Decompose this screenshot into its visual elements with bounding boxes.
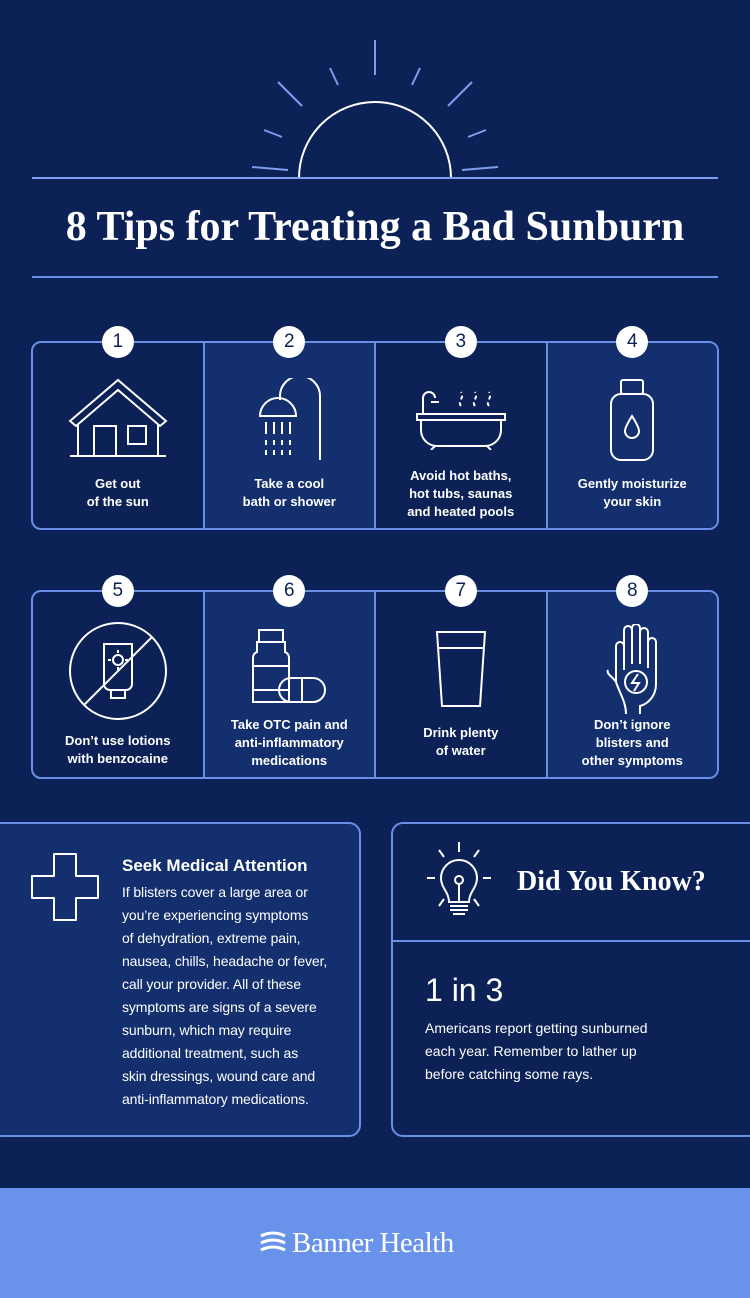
footer (0, 1188, 750, 1298)
tips row 1: 2 (284, 331, 295, 352)
tip 1: of the sun (87, 494, 149, 509)
tip 6: anti-inflammatory (235, 735, 344, 750)
body text: If blisters cover a large area or (122, 884, 308, 900)
panel: seek medical attention (0, 822, 361, 1137)
body text (122, 884, 327, 1107)
tip 5 (33, 592, 204, 777)
body text: you’re experiencing symptoms (122, 907, 308, 923)
tip 8: Don’t ignore (594, 717, 671, 732)
tip 4: your skin (603, 494, 661, 509)
tip 1: Get out (95, 476, 140, 491)
tips row 2 (31, 590, 719, 779)
stat text: before catching some rays. (425, 1066, 593, 1082)
title: 8 Tips for Treating a Bad Sunburn (66, 204, 684, 250)
stat: 1 in 3 (425, 972, 503, 1008)
tip 7 (376, 592, 548, 777)
body text: skin dressings, wound care and (122, 1068, 315, 1084)
stat text: each year. Remember to lather up (425, 1043, 637, 1059)
tip 2: bath or shower (243, 494, 336, 509)
tips row 1: 3 (455, 331, 466, 352)
body text: anti-inflammatory medications. (122, 1091, 309, 1107)
panel: did you know (391, 822, 750, 1137)
tips row 2: 6 (284, 580, 295, 601)
logo: Banner Health (292, 1226, 454, 1258)
tip 4 (548, 343, 717, 528)
tip 8: blisters and (596, 735, 669, 750)
tips row 1: 1 (112, 331, 123, 352)
heading: Did You Know? (517, 866, 706, 897)
heading: Seek Medical Attention (122, 856, 307, 875)
body text: of dehydration, extreme pain, (122, 930, 300, 946)
tips row 2: 7 (455, 580, 466, 601)
tip 2 (204, 343, 376, 528)
tip 7: of water (436, 743, 486, 758)
tip 8: other symptoms (582, 753, 683, 768)
tip 1 (33, 343, 204, 528)
body text: symptoms are signs of a severe (122, 999, 317, 1015)
tip 6: Take OTC pain and (231, 717, 348, 732)
body text: sunburn, which may require (122, 1022, 291, 1038)
tip 3: hot tubs, saunas (409, 486, 512, 501)
tip 3: and heated pools (407, 504, 514, 519)
tips row 2: 8 (627, 580, 638, 601)
sun graphic (32, 40, 718, 179)
icon: light bulb (427, 842, 491, 915)
tip 5: Don’t use lotions (65, 733, 170, 748)
tips row 1 (31, 341, 719, 530)
body text: nausea, chills, headache or fever, (122, 953, 327, 969)
body text: call your provider. All of these (122, 976, 301, 992)
tip 6 (204, 592, 376, 777)
stat text: Americans report getting sunburned (425, 1020, 648, 1036)
tip 8 (548, 592, 717, 777)
body text: additional treatment, such as (122, 1045, 298, 1061)
tip 4: Gently moisturize (578, 476, 687, 491)
tip 3 (376, 343, 548, 528)
tips row 1: 4 (627, 331, 638, 352)
icon: medical cross (31, 853, 99, 921)
tip 3: Avoid hot baths, (410, 468, 511, 483)
tip 5: with benzocaine (68, 751, 168, 766)
stat text (425, 1020, 648, 1082)
tip 7: Drink plenty (423, 725, 498, 740)
tip 2: Take a cool (254, 476, 324, 491)
tips row 2: 5 (112, 580, 123, 601)
tip 6: medications (251, 753, 327, 768)
